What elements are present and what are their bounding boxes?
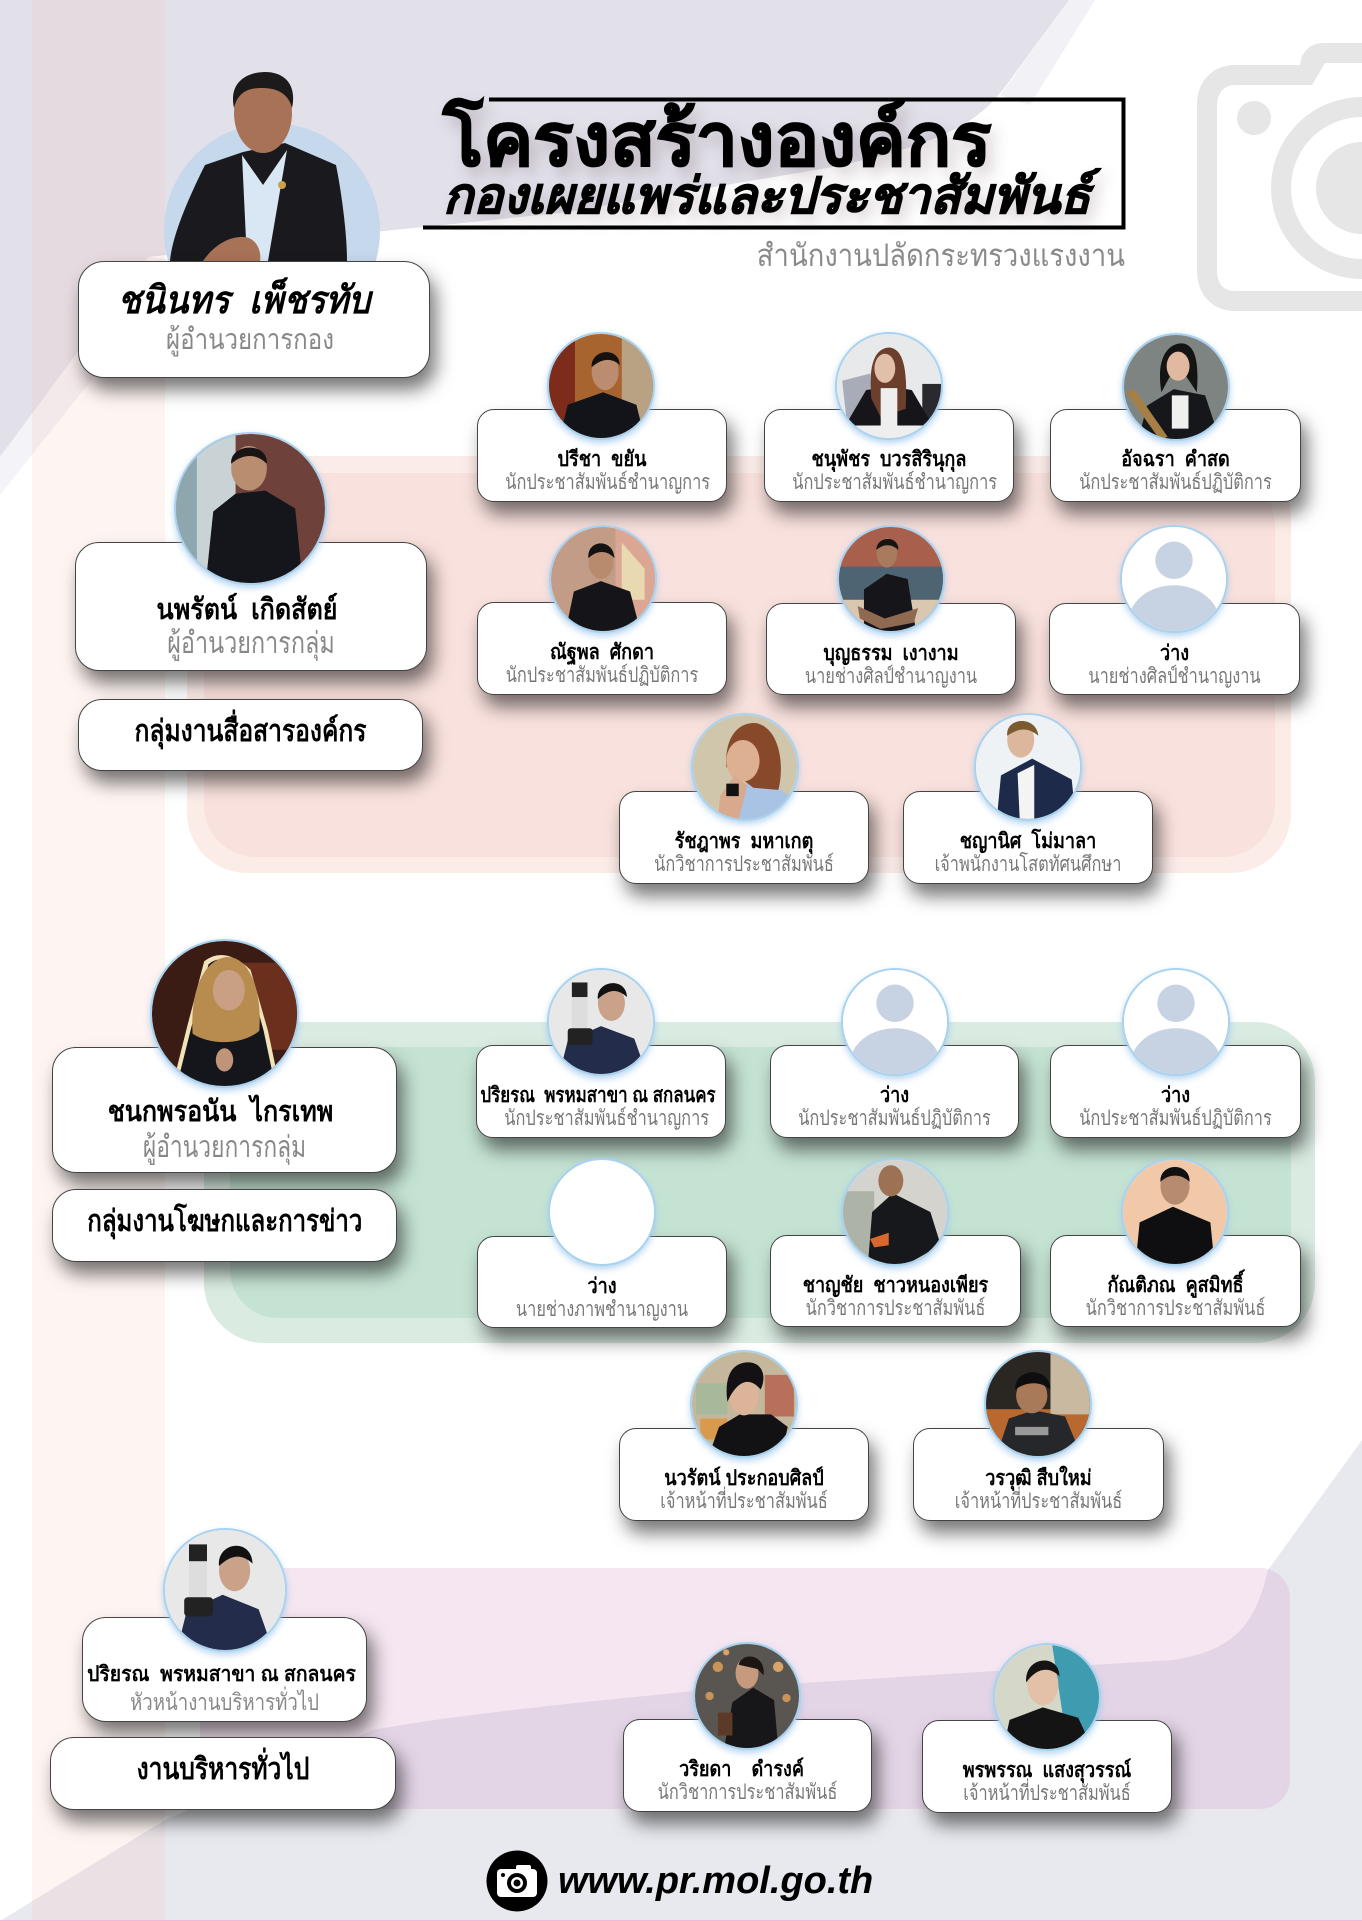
photo placeholder: ว่าง 1 [841,968,949,1076]
staff card: ว่าง 2 [1050,1045,1301,1138]
staff card: พรพรรณ [922,1720,1172,1813]
staff card: ปรีชา: ปรีชา ขยัน [558,448,646,471]
staff card: ชญานิศ [903,791,1153,884]
staff card: พรพรรณ: เจ้าหน้าที่ประชาสัมพันธ์ [963,1782,1131,1805]
card: division director [78,261,430,378]
staff card: กัณติภณ: นักวิชาการประชาสัมพันธ์ [1086,1297,1265,1320]
staff card: ว่าง 1: ว่าง [880,1084,909,1107]
label: group 3: งานบริหารทั่วไป [137,1753,309,1786]
staff card: วรวุฒิ [913,1428,1164,1521]
photo placeholder: ว่าง [1120,525,1228,633]
staff card: ว่าง 3 [477,1236,727,1328]
photo: group 2 lead [150,939,299,1088]
staff card: อัจฉรา: นักประชาสัมพันธ์ปฏิบัติการ [1079,471,1272,494]
staff card: อัจฉรา: อัจฉรา คำสด [1121,448,1230,471]
staff card: ชนุพัชร [764,409,1014,502]
photo: ชญานิศ [974,713,1082,821]
group 3 lead [82,1617,367,1722]
staff card: ว่าง (ช่างศิลป์) [1049,603,1300,695]
staff card: ชนุพัชร: นักประชาสัมพันธ์ชำนาญการ [792,471,997,494]
photo: รัชฎาพร [691,713,799,821]
photo: ปริยรณ [547,968,655,1076]
staff card: ว่าง 3: ว่าง [587,1275,617,1298]
staff card: วรวุฒิ: วรวุฒิ สืบใหม่ [985,1467,1092,1490]
panel: red group backdrop [187,456,1291,873]
staff card: ปรีชา: นักประชาสัมพันธ์ชำนาญการ [505,471,710,494]
label: group 3 [50,1737,396,1810]
photo: group 1 lead [174,432,327,585]
staff card: ว่าง 2: นักประชาสัมพันธ์ปฏิบัติการ [1079,1107,1272,1130]
photo: ณัฐพล [549,525,657,633]
staff card: รัชฎาพร: รัชฎาพร มหาเกตุ [675,830,813,853]
footer: website [486,1850,873,1912]
staff card: ณัฐพล [477,602,727,695]
staff card: ปรีชา [477,409,727,502]
photo: ปรีชา [547,332,655,440]
group 1 lead [75,542,427,671]
group 2 lead [52,1047,397,1173]
label: group 1: กลุ่มงานสื่อสารองค์กร [134,715,367,748]
staff card: ชญานิศ: เจ้าพนักงานโสตทัศนศึกษา [935,853,1121,876]
icon: camera watermark [1197,43,1362,311]
photo: group 3 lead [163,1528,287,1652]
name: ปริยรณ พรหมสาขา ณ สกลนคร [87,1663,356,1686]
photo placeholder: blank [548,1158,656,1266]
staff card: นวรัตน์: นวรัตน์ ประกอบศิลป์ [664,1467,824,1490]
photo: ชาญชัย [841,1158,949,1266]
staff card: ชาญชัย [770,1235,1021,1327]
staff card: ว่าง 1: นักประชาสัมพันธ์ปฏิบัติการ [798,1107,991,1130]
staff card: กัณติภณ: กัณติภณ คูสมิทธิ์ [1107,1274,1244,1297]
photo: พรพรรณ [993,1643,1101,1751]
title line 1: โครงสร้างองค์กร [443,100,991,181]
staff card: บุญธรรม: นายช่างศิลป์ชำนาญงาน [805,665,977,688]
name: ชนกพรอนัน ไกรเทพ [108,1096,333,1128]
role: หัวหน้างานบริหารทั่วไป [130,1689,319,1715]
photo: นวรัตน์ [690,1350,798,1458]
staff card: ณัฐพล: ณัฐพล ศักดา [550,641,654,664]
staff card: ปริยรณ: นักประชาสัมพันธ์ชำนาญการ [504,1107,709,1130]
title [423,96,1126,230]
staff card: วรวุฒิ: เจ้าหน้าที่ประชาสัมพันธ์ [955,1490,1122,1513]
staff card: บุญธรรม: บุญธรรม เงางาม [823,642,959,665]
staff card: ชญานิศ: ชญานิศ โม่มาลา [960,830,1096,853]
title frame [423,98,1126,230]
label: group 1 [78,699,423,771]
panel: purple group backdrop [200,1568,1290,1809]
staff card: บุญธรรม [766,603,1016,695]
staff card: ปริยรณ [476,1045,726,1138]
photo: ชนุพัชร [835,332,943,440]
icon: camera [486,1850,548,1912]
staff card: ชนุพัชร: ชนุพัชร บวรสิรินุกุล [812,448,966,471]
staff card: กัณติภณ [1050,1235,1301,1327]
role: ผู้อำนวยการกอง [166,324,334,356]
photo: วริยดา [693,1642,801,1750]
staff card: รัชฎาพร [619,791,869,884]
staff card: อัจฉรา [1050,409,1301,502]
staff card: ณัฐพล: นักประชาสัมพันธ์ปฏิบัติการ [506,664,698,687]
staff card: ปริยรณ: ปริยรณ พรหมสาขา ณ สกลนคร [480,1084,716,1107]
photo: division director [164,72,380,261]
photo: อัจฉรา [1122,333,1230,441]
staff card: ชาญชัย: นักวิชาการประชาสัมพันธ์ [806,1297,985,1320]
photo placeholder: ว่าง 2 [1122,968,1230,1076]
staff card: พรพรรณ: พรพรรณ แสงสุวรรณ์ [963,1759,1131,1782]
staff card: ว่าง (ช่างศิลป์): ว่าง [1160,642,1189,665]
name: นพรัตน์ เกิดสัตย์ [157,594,337,626]
photo: กัณติภณ [1121,1158,1229,1266]
staff card: ว่าง 3: นายช่างภาพชำนาญงาน [516,1298,688,1321]
photo: บุญธรรม [837,525,945,633]
label: group 2: กลุ่มงานโฆษกและการข่าว [87,1205,362,1238]
bottom edge line [0,1920,1362,1921]
staff card: วริยดา: นักวิชาการประชาสัมพันธ์ [658,1781,837,1804]
role: ผู้อำนวยการกลุ่ม [143,1131,306,1164]
staff card: ว่าง 2: ว่าง [1161,1084,1190,1107]
staff card: นวรัตน์: เจ้าหน้าที่ประชาสัมพันธ์ [660,1490,828,1513]
role: ผู้อำนวยการกลุ่ม [167,627,335,660]
staff card: ว่าง (ช่างศิลป์): นายช่างศิลป์ชำนาญงาน [1088,665,1261,688]
staff card: รัชฎาพร: นักวิชาการประชาสัมพันธ์ [654,853,834,876]
name: ชนินทร เพ็ชรทับ [118,280,370,322]
staff card: ว่าง 1 [770,1045,1019,1138]
staff card: วริยดา [623,1719,872,1812]
title line 2: กองเผยแพร่และประชาสัมพันธ์ [443,168,1091,224]
staff card: ชาญชัย: ชาญชัย ชาวหนองเพียร [803,1274,988,1297]
url: www.pr.mol.go.th [558,1860,873,1902]
staff card: นวรัตน์ [619,1428,869,1521]
photo: วรวุฒิ [984,1350,1092,1458]
staff card: วริยดา: วริยดา ดำรงค์ [679,1758,804,1781]
subtitle: สำนักงานปลัดกระทรวงแรงงาน [757,238,1125,273]
panel: green group backdrop [204,1022,1315,1343]
label: group 2 [52,1189,397,1262]
